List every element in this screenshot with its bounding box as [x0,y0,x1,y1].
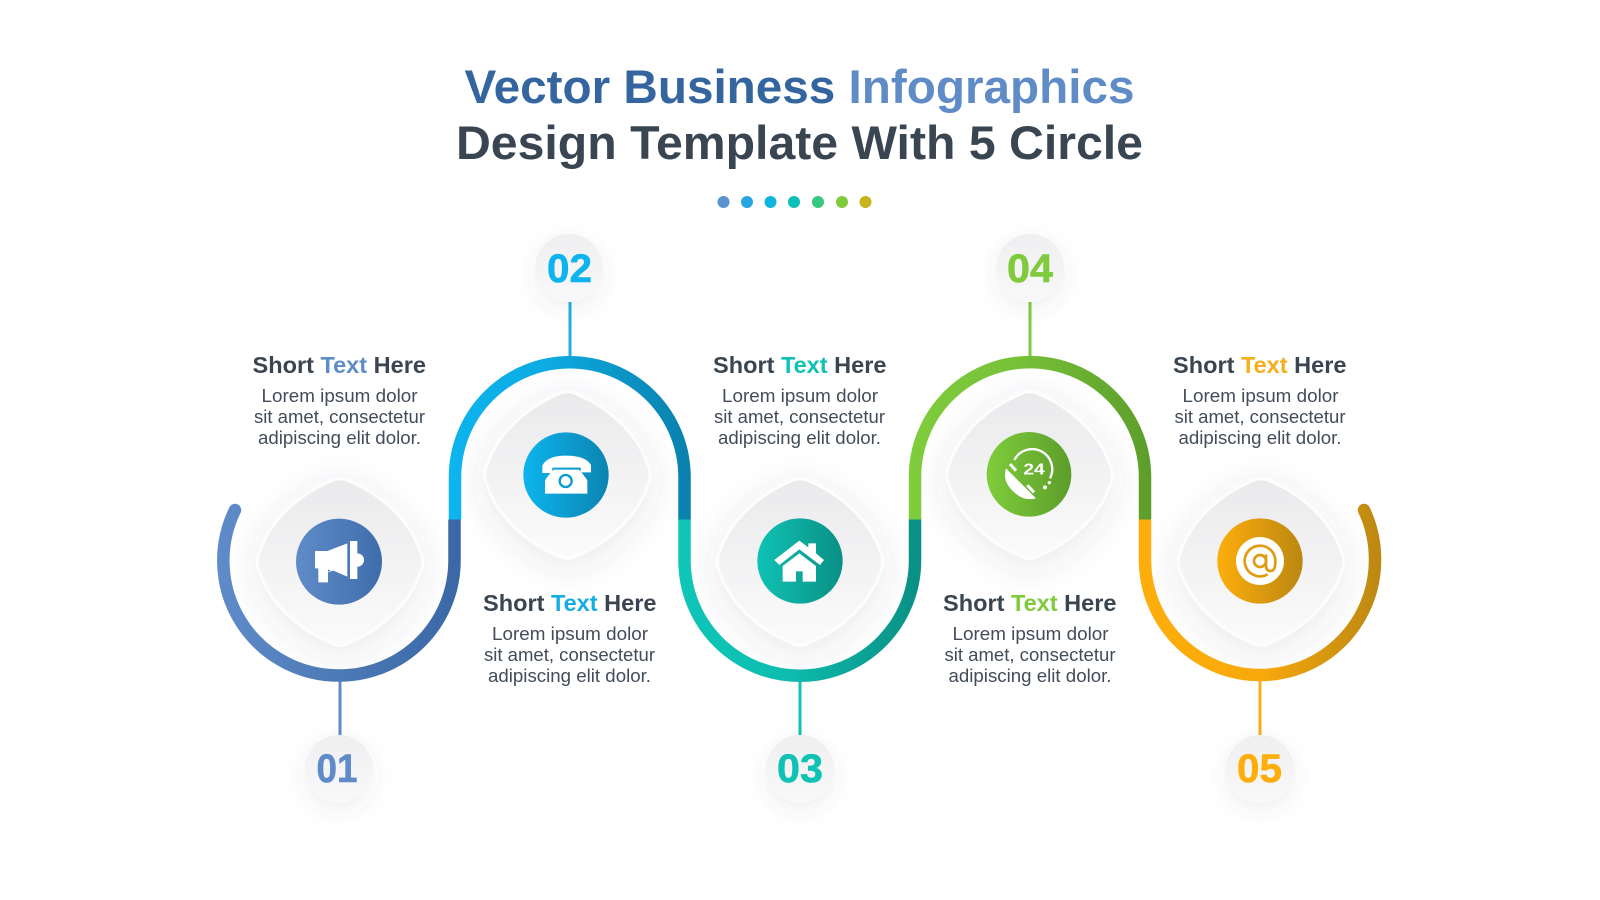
text block 2: Lorem ipsum dolor [492,623,648,644]
badge 02 [535,234,603,302]
text block 5: Lorem ipsum dolor [1182,385,1338,406]
connector stems [338,302,1262,735]
badge 03: 03 [777,747,823,791]
wave segment 4 [915,362,1145,520]
text block 5: Short Text Here [1173,352,1346,378]
badge 04: 04 [1007,247,1054,291]
text block 1: Short Text Here [252,352,426,378]
badge 05: 05 [1237,747,1282,791]
title [456,60,1143,169]
badge 03 [766,735,834,803]
wave segment 5 [1145,507,1375,675]
icon: telephone [523,432,609,518]
text block 1: Lorem ipsum dolor [262,385,418,406]
text block 3: Lorem ipsum dolor [722,385,878,406]
text block 1 [252,352,426,448]
decorative dot row [718,196,872,208]
text block 3 [713,352,887,448]
icon: house [757,518,843,604]
text block 3: adipiscing elit dolor. [718,427,881,448]
text block 1: sit amet, consectetur [254,406,425,427]
diamond panel 4 [947,392,1112,558]
diamond panel 1 [257,479,423,645]
diamond panel 5 [1178,479,1344,645]
badge 01 [305,735,373,803]
icon: megaphone [296,519,382,605]
title: Vector Business Infographics [464,60,1134,113]
title: Design Template With 5 Circle [456,116,1143,169]
text block 5: adipiscing elit dolor. [1178,427,1342,448]
wave segment 1 [223,507,454,676]
text block 2: sit amet, consectetur [484,644,655,665]
badge 02: 02 [547,247,592,291]
text block 2: adipiscing elit dolor. [488,665,651,686]
badge 04 [996,234,1064,302]
wave segment 2 [455,362,684,520]
badge 05 [1226,735,1294,803]
text block 4: sit amet, consectetur [944,644,1116,665]
text block 2 [483,590,657,686]
text block 4: Lorem ipsum dolor [952,623,1108,644]
text block 4 [943,590,1116,686]
icon: at sign [1217,518,1303,604]
diamond panel 2 [485,392,650,558]
badge 01: 01 [316,747,358,791]
icon: 24 hour phone [987,432,1071,517]
text block 1: adipiscing elit dolor. [258,427,421,448]
text block 4: Short Text Here [943,590,1116,616]
icon: 24 hour phone: 24 [1023,461,1045,478]
text block 3: sit amet, consectetur [714,406,885,427]
diamond panel 3 [717,479,883,645]
text block 5: sit amet, consectetur [1174,406,1346,427]
text block 3: Short Text Here [713,352,887,378]
text block 4: adipiscing elit dolor. [948,665,1112,686]
text block 5 [1173,352,1346,448]
text block 2: Short Text Here [483,590,657,616]
wave segment 3 [684,520,915,676]
